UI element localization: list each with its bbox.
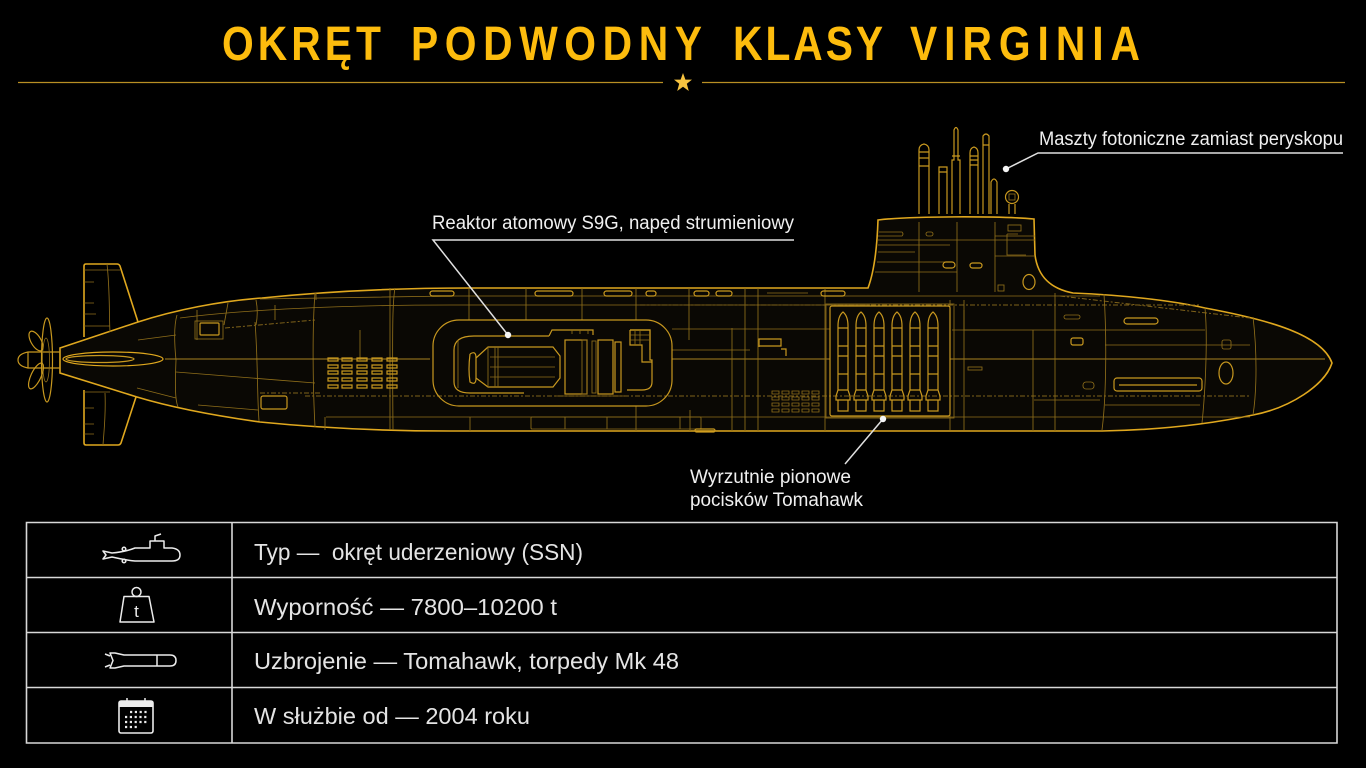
callout: reactor	[432, 213, 794, 338]
tail fins	[84, 264, 138, 445]
icon: calendar	[119, 698, 153, 733]
title divider with star	[18, 73, 1345, 91]
reactor compartment	[433, 320, 672, 406]
missile 4	[890, 312, 904, 411]
submarine blueprint	[18, 128, 1332, 445]
callout: launch tubes: Wyrzutnie pionowe	[690, 467, 851, 488]
missile 2	[854, 312, 868, 411]
icon: submarine	[103, 534, 180, 563]
masts	[919, 128, 1018, 214]
hull hatches and vents	[63, 291, 1233, 432]
row 1 text: Typ — okręt uderzeniowy (SSN)	[254, 539, 583, 565]
callout: reactor: Reaktor atomowy S9G, napęd strumieniowy	[432, 213, 794, 234]
specification table	[26, 522, 1337, 743]
missile 6	[926, 312, 940, 411]
icon: weight	[120, 588, 154, 622]
title: VIRGINIA	[910, 18, 1140, 71]
row 2 text: Wyporność — 7800–10200 t	[254, 594, 558, 620]
callout: launch tubes: pocisków Tomahawk	[690, 490, 863, 511]
sail details	[875, 222, 1035, 292]
missile 1	[836, 312, 850, 411]
title: KLASY	[733, 18, 883, 71]
callout: launch tubes	[690, 416, 886, 511]
callout: mast: Maszty fotoniczne zamiast peryskopu	[1039, 129, 1343, 150]
hull structure lines	[137, 288, 1325, 431]
row 3 text: Uzbrojenie — Tomahawk, torpedy Mk 48	[254, 648, 679, 674]
missile 3	[872, 312, 886, 411]
row 4 text: W służbie od — 2004 roku	[254, 703, 530, 729]
hull outline	[60, 217, 1332, 431]
title: PODWODNY	[411, 18, 702, 71]
callout: mast	[1003, 129, 1343, 172]
title: OKRĘT	[222, 18, 381, 71]
missile 5	[908, 312, 922, 411]
propeller	[18, 318, 60, 402]
icon: torpedo	[105, 653, 176, 668]
vertical launch tubes	[826, 300, 980, 418]
icon: weight: t	[134, 602, 139, 621]
